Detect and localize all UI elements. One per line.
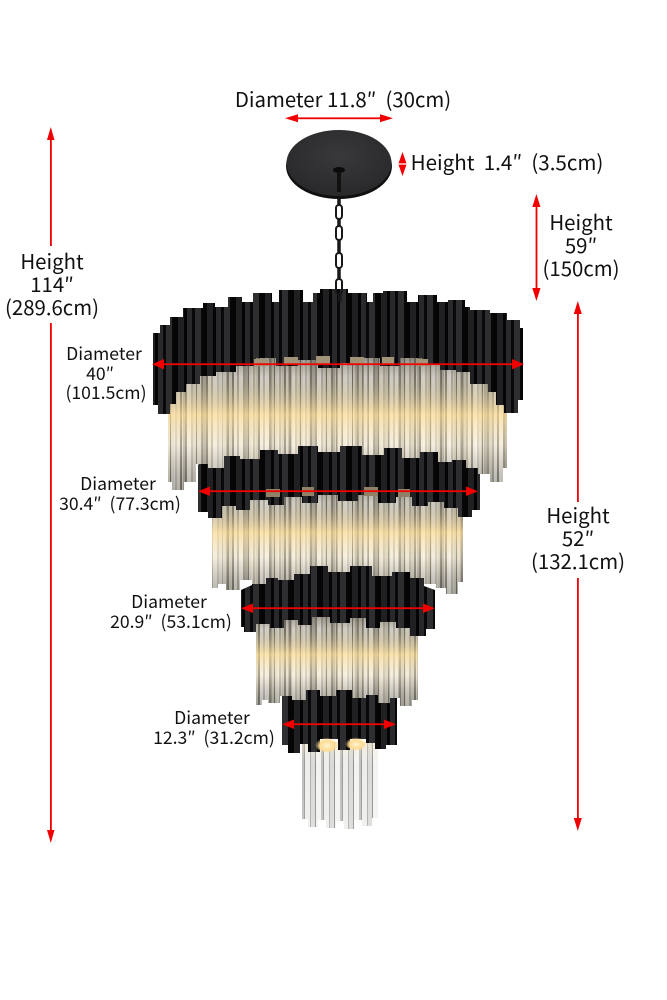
- label: tier 1 diameter: Diameter: [66, 341, 142, 366]
- arrow: overall height: [47, 127, 54, 843]
- label: tier 3 diameter: 20.9″ (53.1cm): [110, 609, 232, 634]
- glowing bulbs: [315, 736, 339, 752]
- tier 4 bulb right: [345, 736, 367, 750]
- metal fittings: [266, 489, 280, 497]
- label: drop height: 59″: [565, 229, 597, 259]
- label: canopy height: Height 1.4″ (3.5cm): [411, 146, 603, 176]
- label: canopy diameter: Diameter 11.8″ (30cm): [235, 83, 451, 113]
- label: drop height: Height: [549, 206, 613, 236]
- tier 4 black band: [282, 682, 397, 753]
- metal fittings: [254, 356, 428, 366]
- arrow: tier 4 diameter: [282, 720, 396, 729]
- label: tier 4 diameter: Diameter: [174, 705, 250, 730]
- label: tier 3 diameter: Diameter: [131, 589, 207, 614]
- arrow: canopy diameter: [285, 114, 393, 122]
- label: overall height: Height: [20, 245, 84, 275]
- tier 3 crystals: [256, 610, 418, 706]
- label: drop height: (150cm): [542, 252, 620, 282]
- tier 2 black band: [198, 435, 480, 518]
- arrow: tier 3 diameter: [241, 604, 435, 613]
- label: tier 2 diameter: Diameter: [80, 471, 156, 496]
- label: tier 1 diameter: (101.5cm): [65, 380, 147, 405]
- arrow: body height: [574, 301, 582, 831]
- tier 1 black band: [153, 289, 523, 414]
- label: tier 4 diameter: 12.3″ (31.2cm): [153, 725, 275, 750]
- label: overall height: 114″: [30, 268, 74, 298]
- tier 2 crystals: [212, 480, 463, 594]
- arrow: canopy height: [398, 152, 406, 176]
- label: body height: (132.1cm): [531, 545, 625, 575]
- tier 3 black band: [241, 555, 435, 636]
- tier 4 crystals: [302, 742, 378, 829]
- chain: [336, 170, 342, 302]
- label: tier 1 diameter: 40″: [86, 361, 114, 386]
- label: tier 2 diameter: 30.4″ (77.3cm): [59, 491, 181, 516]
- chandelier: [153, 130, 523, 829]
- arrow: canopy to band height: [532, 194, 540, 301]
- ceiling canopy: [286, 130, 392, 199]
- tier 1 crystals: [168, 350, 507, 490]
- label: body height: Height: [546, 499, 610, 529]
- arrow: tier 2 diameter: [198, 486, 478, 496]
- arrow: tier 1 diameter: [152, 359, 524, 369]
- label: overall height: (289.6cm): [5, 291, 99, 321]
- label: body height: 52″: [562, 522, 594, 552]
